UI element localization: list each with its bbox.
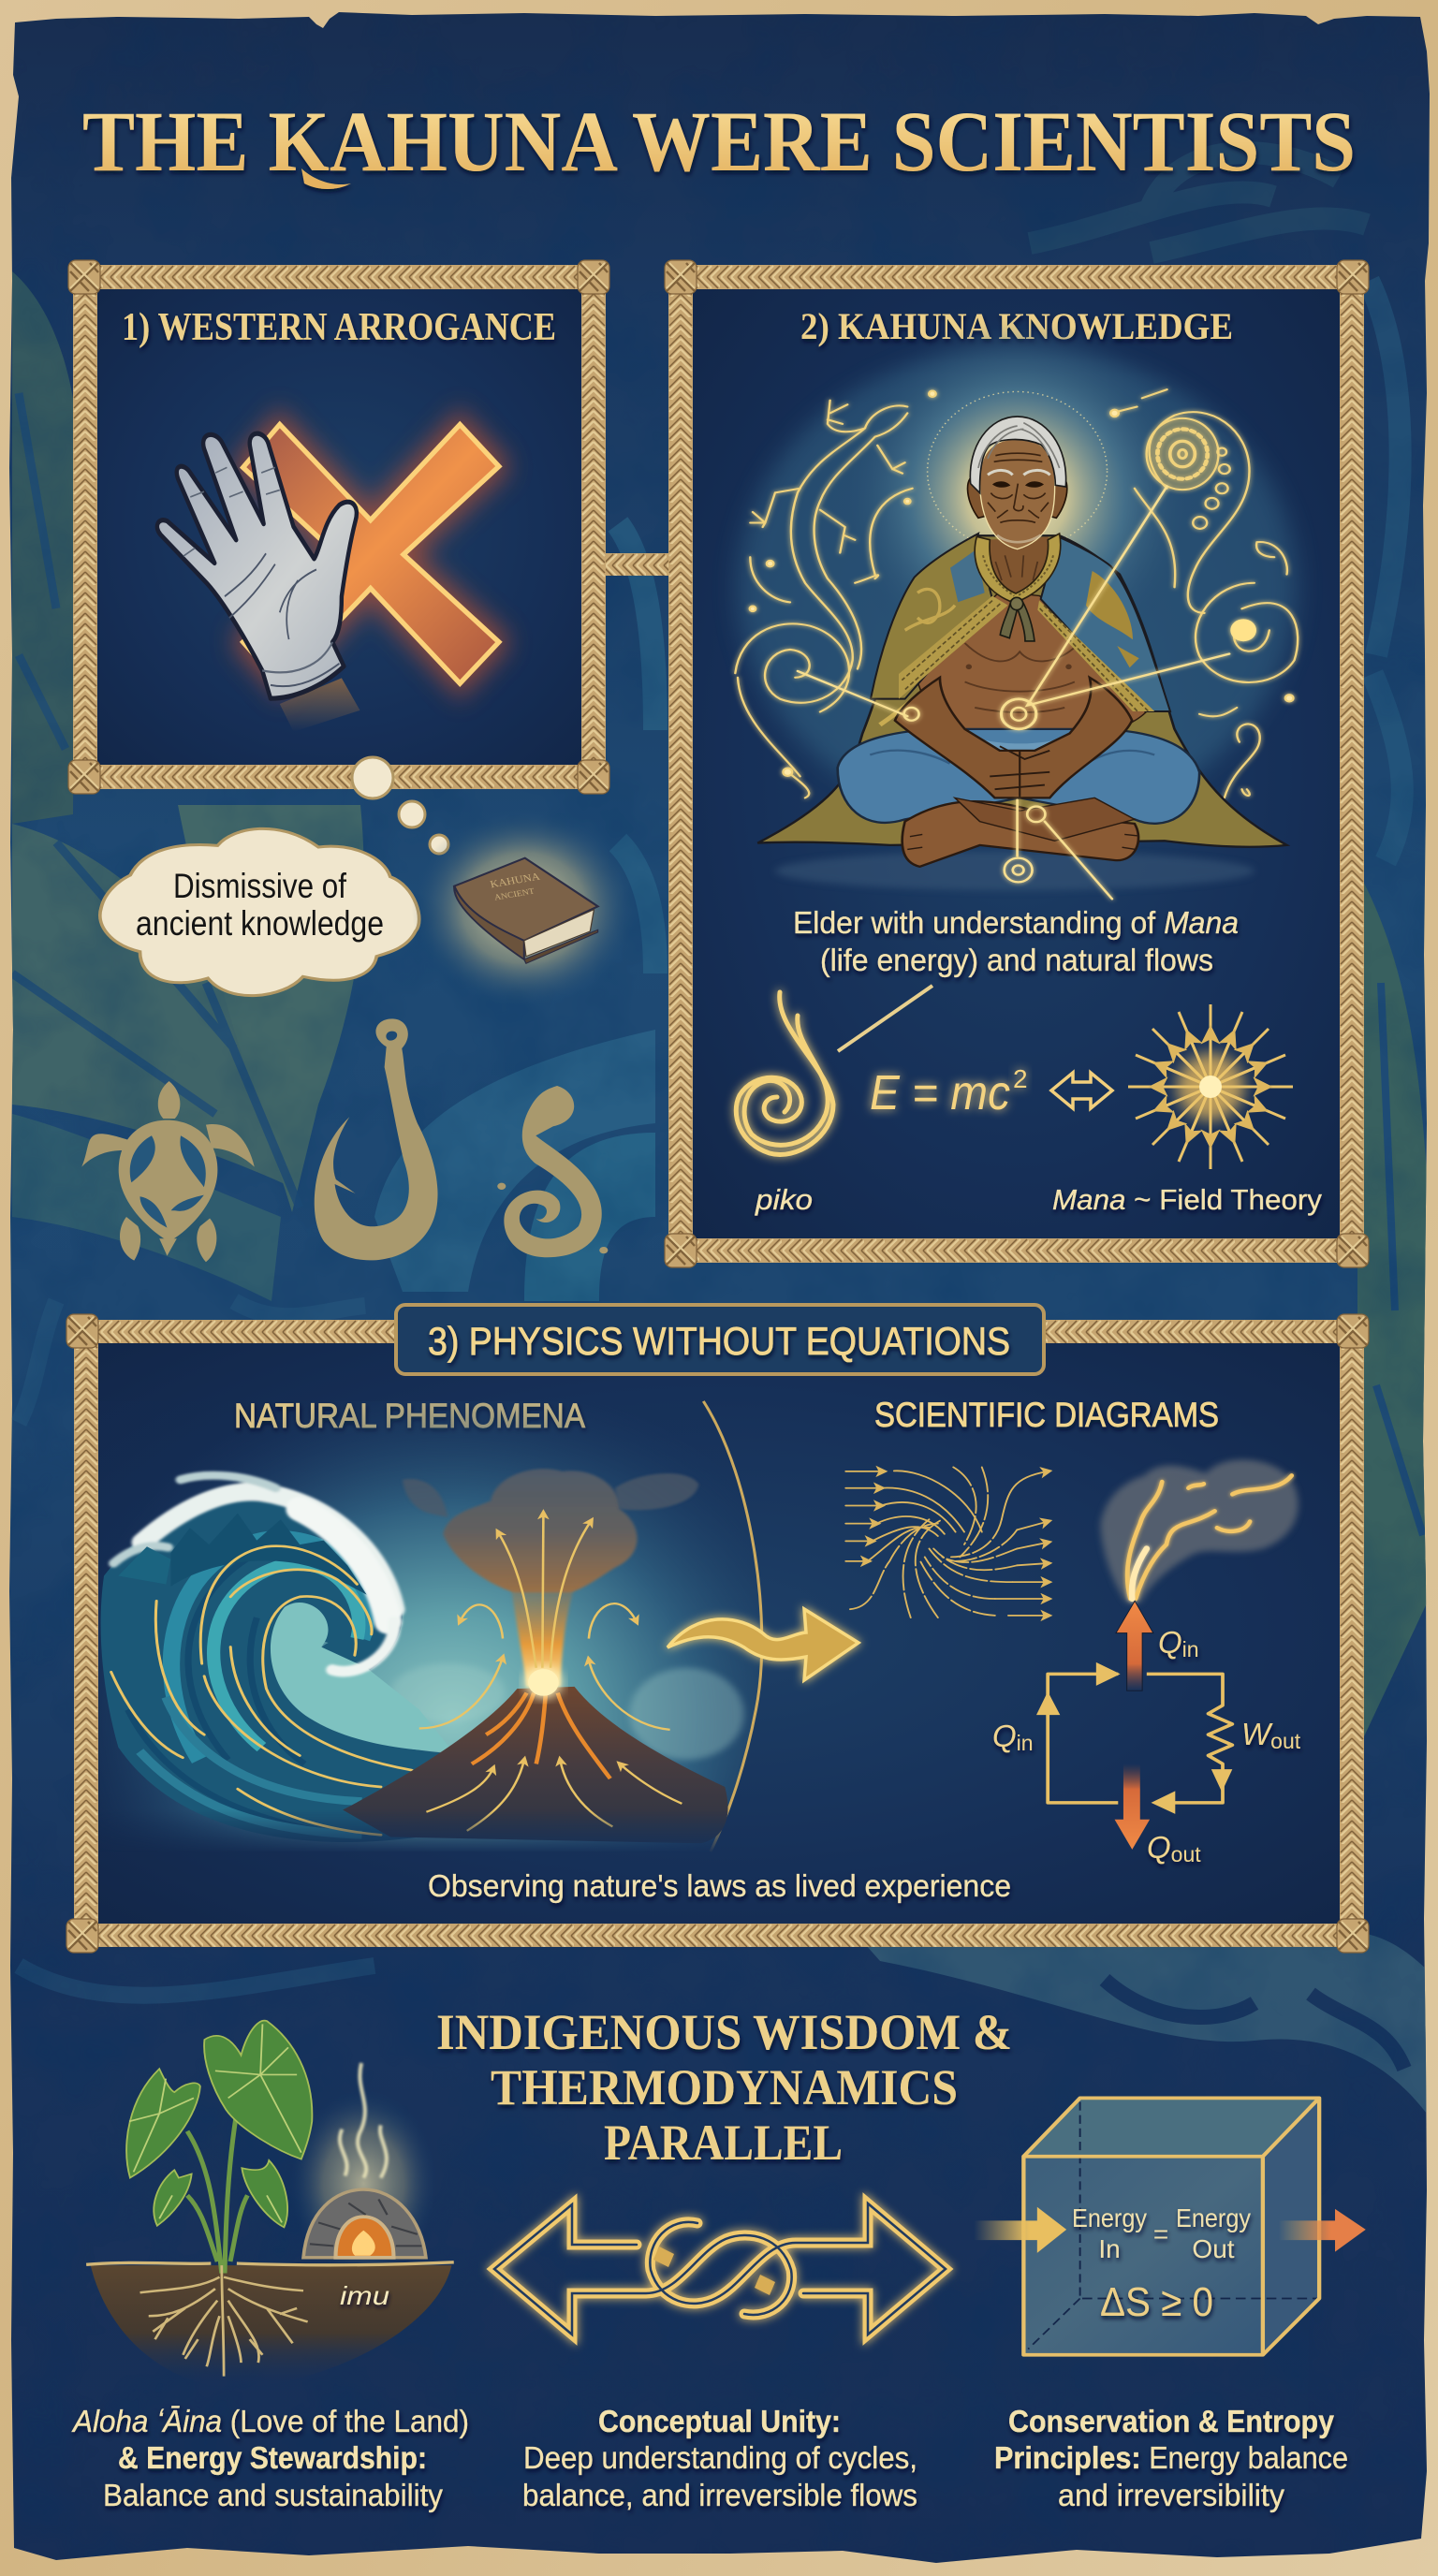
illustration: energy cube	[974, 2098, 1366, 2355]
thought cloud: dismissive of ancient knowledge: Dismissive of	[173, 867, 347, 905]
heading: indigenous wisdom and thermodynamics parallel: THERMODYNAMICS	[491, 2059, 958, 2115]
text: conceptual unity: Conceptual Unity:	[598, 2404, 841, 2438]
banner heading: 3) PHYSICS WITHOUT EQUATIONS	[428, 1319, 1010, 1363]
panel: kahuna knowledge	[665, 260, 1369, 1267]
text: aloha aina: & Energy Stewardship:	[118, 2440, 427, 2475]
heading: indigenous wisdom and thermodynamics parallel: INDIGENOUS WISDOM &	[436, 2004, 1012, 2060]
labels: energy balance: =	[1153, 2219, 1168, 2248]
connector rope between panels 1 and 2	[605, 553, 668, 576]
equation: E = mc squared: E = mc	[870, 1066, 1010, 1120]
arms and hands	[895, 678, 1132, 798]
leader line from piko	[838, 986, 932, 1051]
labels: energy balance: Energy	[1072, 2203, 1147, 2232]
caption: elder with understanding of mana: (life energy) and natural flows	[820, 943, 1213, 977]
title: THE KAHUNA WERE SCIENTISTS	[82, 94, 1356, 189]
icon: glowing red X and gloved hand	[157, 424, 499, 732]
imu glow	[290, 2090, 436, 2277]
banner heading	[396, 1305, 1044, 1374]
panel 3 rope frame	[66, 1314, 1369, 1953]
equation exponent: 2	[1013, 1064, 1028, 1093]
taro stems	[187, 2117, 247, 2273]
panel 1 heading: 1) WESTERN ARROGANCE	[122, 306, 556, 349]
piko links	[798, 486, 1229, 899]
icon: ancient book: KAHUNA	[489, 871, 542, 890]
labels: thermodynamic quantities: Q	[1158, 1625, 1182, 1660]
labels: thermodynamic quantities: in	[1017, 1731, 1034, 1755]
cycle diagram	[1036, 1601, 1232, 1850]
labels: thermodynamic quantities: Q	[992, 1719, 1017, 1753]
icon: fish hook	[315, 1018, 438, 1260]
arrow: phenomena to diagrams	[668, 1609, 858, 1680]
label: piko: piko	[755, 1183, 813, 1216]
labels: thermodynamic quantities: W	[1241, 1717, 1270, 1751]
label: mana field theory: Mana ~ Field Theory	[1052, 1183, 1322, 1216]
panel 2 rope frame	[665, 260, 1369, 1267]
icon: ancient book: ANCIENT	[493, 887, 536, 902]
torso	[915, 592, 1150, 736]
caption: elder with understanding of mana	[793, 905, 1239, 977]
labels: thermodynamic quantities: Q	[1147, 1830, 1171, 1865]
subheading: scientific diagrams: SCIENTIFIC DIAGRAMS	[874, 1396, 1219, 1434]
diagrams: streamlines, flame, cycle	[845, 1459, 1299, 1850]
text: aloha aina	[71, 2404, 469, 2512]
icon: piko spiral	[736, 992, 833, 1154]
labels: thermodynamic quantities	[992, 1625, 1301, 1866]
illustration: wave and volcano	[99, 1401, 762, 1852]
labels: thermodynamic quantities: out	[1270, 1729, 1301, 1753]
taro roots	[140, 2265, 308, 2377]
panel: physics without equations	[66, 1305, 1369, 1953]
face	[968, 476, 1067, 518]
icon: knot double arrow	[494, 2203, 946, 2334]
icon: double arrow	[1051, 1073, 1112, 1108]
cape tie	[1000, 601, 1034, 641]
thought cloud: dismissive of ancient knowledge: ancient knowledge	[136, 904, 384, 943]
text: aloha aina: Balance and sustainability	[103, 2478, 443, 2512]
text: conservation and entropy: and irreversibility	[1058, 2478, 1284, 2512]
trousers	[838, 729, 1199, 824]
text: conceptual unity: balance, and irreversible flows	[522, 2478, 917, 2512]
text: aloha aina: Aloha ʻĀina (Love of the Land)	[71, 2404, 469, 2438]
thought cloud: dismissive of ancient knowledge	[100, 757, 448, 996]
elder head, neck and shoulders	[871, 417, 1170, 711]
panel 1 rope frame	[68, 260, 609, 794]
label: entropy inequality: ΔS ≥ 0	[1100, 2279, 1213, 2325]
imu steam	[340, 2063, 387, 2178]
soil and ground line	[91, 2265, 451, 2388]
icon: ancient book	[412, 808, 637, 1008]
text: conservation and entropy	[994, 2404, 1348, 2512]
label: imu: imu	[340, 2281, 389, 2310]
text: conceptual unity: Deep understanding of cycles,	[523, 2440, 917, 2475]
background leaves and tribal motifs	[12, 153, 1432, 2121]
icon: honu turtle	[81, 1081, 255, 1262]
taro leaves	[126, 2021, 312, 2227]
icon: spiral	[504, 1086, 602, 1257]
caption: elder with understanding of mana: Elder with understanding of Mana	[793, 905, 1239, 940]
heading: indigenous wisdom and thermodynamics parallel	[436, 2004, 1012, 2171]
heading: indigenous wisdom and thermodynamics parallel: PARALLEL	[604, 2115, 843, 2171]
labels: energy balance: In	[1098, 2234, 1121, 2263]
text: conceptual unity	[522, 2404, 917, 2512]
arrow: energy in	[974, 2207, 1066, 2253]
illustration: kahuna elder with mana spirals	[735, 316, 1298, 899]
vortex streamlines	[845, 1467, 1048, 1617]
text: conservation and entropy: Principles: Energy balance	[994, 2440, 1348, 2475]
subheading: natural phenomena: NATURAL PHENOMENA	[234, 1397, 585, 1435]
text: conservation and entropy: Conservation & Entropy	[1008, 2404, 1335, 2438]
labels: thermodynamic quantities: in	[1182, 1637, 1199, 1661]
labels: energy balance: Energy	[1176, 2203, 1251, 2232]
caption: observing nature's laws: Observing nature's laws as lived experience	[428, 1868, 1011, 1903]
labels: thermodynamic quantities: out	[1171, 1842, 1201, 1866]
panel 2 heading: 2) KAHUNA KNOWLEDGE	[800, 305, 1233, 347]
crossed legs and feet	[775, 852, 1255, 890]
glowing lizard and spirals	[735, 389, 1298, 798]
ocean wave	[101, 1475, 452, 1842]
labels: energy balance: Out	[1192, 2234, 1235, 2263]
labels: energy balance	[1072, 2203, 1251, 2263]
icon: mana field starburst	[1128, 1004, 1293, 1169]
imu oven	[303, 2189, 426, 2258]
flame and smoke	[1101, 1459, 1299, 1603]
arrow: energy out	[1279, 2209, 1366, 2252]
illustration: taro plant and imu oven	[86, 2021, 454, 2388]
wave foam	[113, 1475, 394, 1672]
panel: western arrogance	[68, 260, 609, 794]
icon group: turtle, fish hook, spiral	[81, 1018, 608, 1262]
cape	[757, 535, 1286, 847]
volcano eruption	[343, 1469, 728, 1843]
